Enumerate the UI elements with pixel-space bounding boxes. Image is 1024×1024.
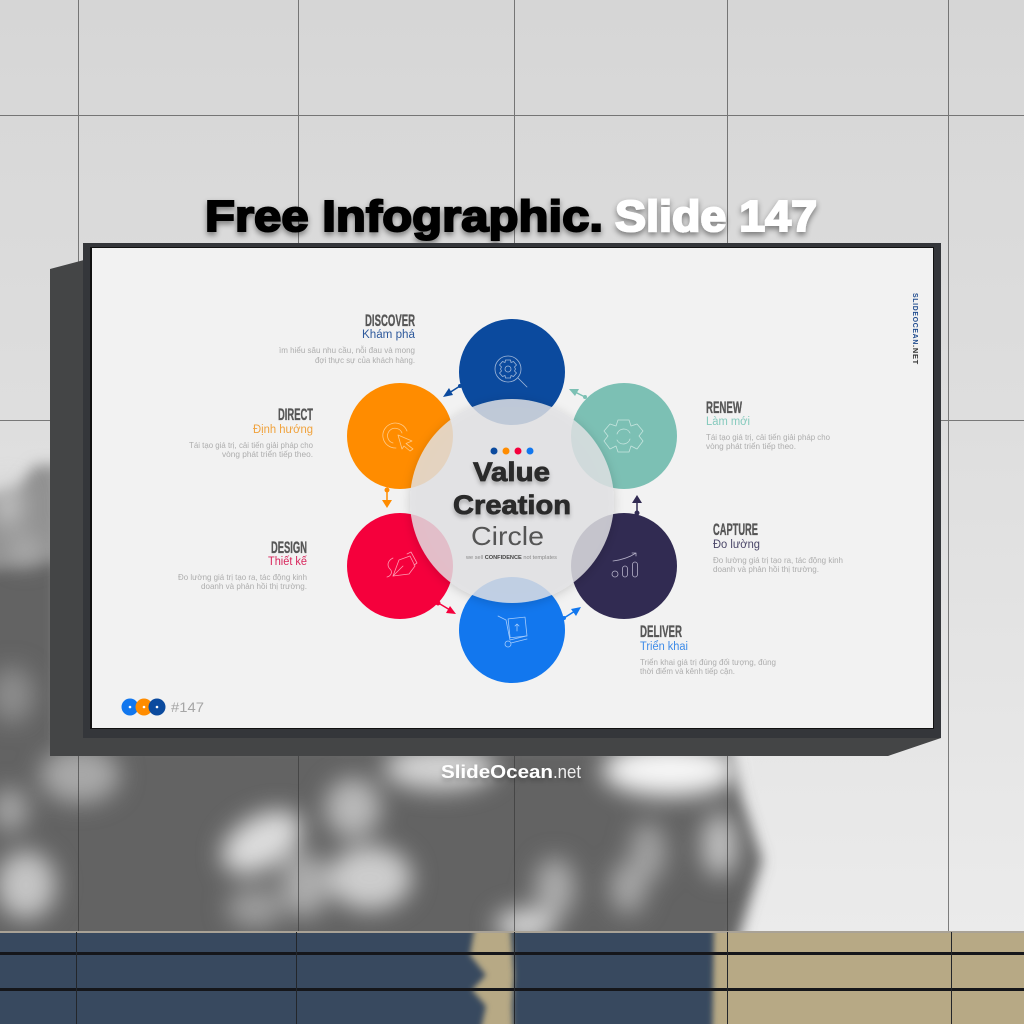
heading: Value Creation: Creation — [453, 490, 571, 520]
text block: direct — [189, 406, 313, 459]
text block: direct: DIRECT — [278, 406, 313, 424]
decorative colour dots — [490, 448, 534, 454]
text block: capture: CAPTURE — [713, 521, 758, 539]
circle: discover — [459, 319, 565, 425]
text block: deliver: Triển khai giá trị đúng đối tượng, đúng — [640, 657, 776, 667]
lower cladding band — [0, 931, 1024, 1024]
icon: hand truck with box — [498, 616, 527, 647]
concrete wall background — [0, 458, 1024, 931]
text block: capture: doanh và phản hồi thị trường. — [713, 564, 819, 574]
text block: discover: đợi thực sự của khách hàng. — [315, 355, 415, 365]
circle: direct — [347, 383, 453, 489]
text block: renew: Làm mới — [706, 416, 750, 428]
heading: Value Creation — [453, 457, 571, 520]
text block: renew: Tái tạo giá trị, cải tiến giải pháp cho — [706, 432, 830, 442]
text block: design: doanh và phản hồi thị trường. — [201, 581, 307, 591]
text block: deliver: thời điểm và kênh tiếp cận. — [640, 666, 735, 676]
circle: capture — [571, 513, 677, 619]
text block: design: DESIGN — [271, 539, 307, 557]
heading: Value Creation: Value — [473, 457, 550, 487]
text block: direct: Định hướng — [253, 424, 313, 436]
billboard side depth — [50, 260, 941, 756]
text block: capture: Đo lường giá trị tạo ra, tác động kinh — [713, 555, 843, 565]
text block: deliver: DELIVER — [640, 623, 682, 641]
text block: direct: Tái tạo giá trị, cải tiến giải pháp cho — [189, 440, 313, 450]
icon: gear with magnifier — [495, 356, 527, 387]
text block: design: Thiết kế — [268, 556, 308, 568]
slide number badge — [122, 698, 204, 716]
slide number badge: #147 — [171, 699, 204, 715]
text block: discover — [279, 312, 416, 365]
tagline: we sell CONFIDENCE not templates — [465, 555, 557, 561]
footer brand: SlideOcean — [441, 762, 553, 782]
icon: target cursor — [383, 423, 413, 451]
heading: Circle: Circle — [471, 521, 544, 551]
text block: design: Đo lường giá trị tạo ra, tác động kinh — [178, 572, 307, 582]
title — [205, 192, 817, 241]
icon: gear with refresh arrows — [604, 420, 643, 452]
center glass circle — [410, 399, 614, 603]
text block: deliver: Triển khai — [640, 641, 688, 653]
text block: discover: Khám phá — [362, 329, 416, 341]
arrows between circles — [382, 384, 642, 620]
title: Slide 147 — [615, 192, 817, 241]
text block: discover: ìm hiểu sâu nhu cầu, nỗi đau và mong — [279, 345, 415, 355]
circle: deliver — [459, 577, 565, 683]
circle: renew — [571, 383, 677, 489]
text block: direct: vòng phát triển tiếp theo. — [222, 449, 313, 459]
text block: discover: DISCOVER — [365, 312, 415, 330]
text block: renew: vòng phát triển tiếp theo. — [706, 441, 796, 451]
icon: growth chart — [612, 553, 638, 577]
footer brand: .net — [553, 762, 581, 782]
text block: design — [178, 539, 308, 591]
text block: capture: Đo lường — [713, 539, 760, 551]
center title block — [453, 448, 571, 561]
text block: renew — [706, 399, 830, 451]
title: Free Infographic. — [205, 192, 603, 241]
vertical brand label: .NET — [911, 345, 918, 365]
text block: capture — [713, 521, 843, 574]
billboard screen — [50, 243, 941, 756]
vertical brand label: SLIDEOCEAN — [911, 293, 918, 345]
tree shadow on wall — [0, 465, 762, 950]
circle: design — [347, 513, 453, 619]
text block: renew: RENEW — [706, 399, 742, 417]
text block: deliver — [640, 623, 776, 676]
icon: pen nib — [387, 552, 417, 577]
